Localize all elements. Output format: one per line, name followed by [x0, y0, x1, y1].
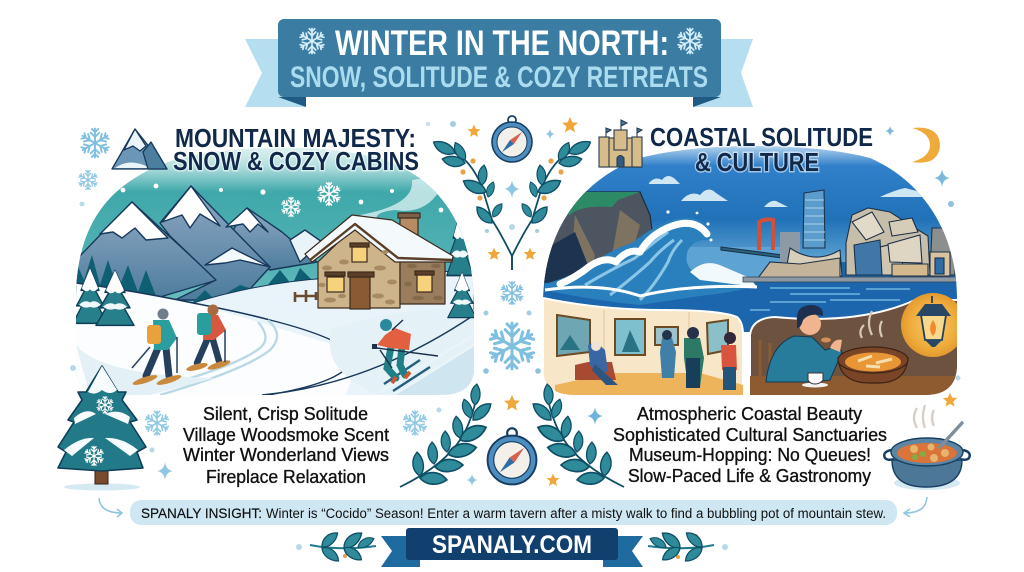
callout: insight bar	[130, 500, 897, 525]
panel: mountain scene	[70, 140, 480, 400]
callout: insight bar: SPANALY INSIGHT:	[141, 505, 262, 521]
tower	[721, 190, 955, 278]
branches: upper	[431, 138, 593, 270]
sea	[540, 262, 960, 332]
cliff	[543, 192, 652, 282]
cabin door and windows	[325, 243, 434, 309]
text block: mountain bullets: Winter Wonderland Views	[183, 445, 389, 465]
text block: mountain bullets: Village Woodsmoke Scent	[183, 425, 389, 445]
arrow: insight right	[904, 497, 927, 517]
banner body	[278, 19, 721, 97]
skier	[372, 319, 438, 391]
icon: castle	[599, 120, 642, 167]
wave	[545, 210, 757, 305]
footer banner	[381, 528, 643, 567]
footer banner: SPANALY.COM	[432, 531, 592, 559]
trees in scene	[76, 268, 102, 324]
title line 2: SNOW, SOLITUDE & COZY RETREATS	[290, 61, 708, 94]
icon: side snowflakes	[78, 129, 535, 435]
icon: title snowflake left	[299, 28, 325, 54]
callout: insight bar: Winter is “Cocido” Season! Enter a warm tavern after a misty walk to find a bubbling pot of mountain stew.	[266, 506, 886, 521]
banner folds	[278, 97, 721, 107]
mountains	[76, 186, 322, 300]
lantern glow	[901, 293, 957, 357]
panel: coastal scene	[540, 140, 965, 398]
text block: coastal bullets: Sophisticated Cultural Sanctuaries	[613, 425, 887, 445]
stew bowl	[838, 358, 908, 383]
title line 1: WINTER IN THE NORTH:	[335, 24, 669, 63]
banner ribbon ends	[245, 39, 753, 107]
icon: moon	[912, 128, 940, 163]
Guggenheim museum	[780, 232, 800, 262]
text block: coastal bullets: Atmospheric Coastal Beauty	[637, 404, 862, 424]
heading: mountain: SNOW & COZY CABINS	[173, 146, 419, 176]
arrow: insight left	[99, 498, 122, 517]
text block: coastal bullets: Slow-Paced Life & Gastronomy	[628, 466, 871, 486]
cabin	[305, 213, 453, 308]
snow ground	[193, 270, 474, 400]
title banner	[245, 19, 753, 107]
text block: mountain bullets: Silent, Crisp Solitude	[203, 404, 368, 424]
heading: coastal: COASTAL SOLITUDE	[650, 122, 873, 152]
heading: coastal: & CULTURE	[695, 147, 819, 177]
text block: coastal bullets: Museum-Hopping: No Queues!	[629, 445, 871, 465]
branches: lower	[400, 384, 624, 487]
gallery panel	[543, 298, 743, 396]
icon: upper compass	[492, 116, 532, 162]
text block: coastal bullets	[613, 404, 887, 486]
snowshoer 1	[132, 308, 182, 387]
icon: mountain	[112, 129, 167, 169]
icon: lower compass	[488, 428, 536, 484]
heading: mountain: MOUNTAIN MAJESTY:	[175, 123, 416, 153]
red bridge	[759, 219, 773, 250]
text block: mountain bullets: Fireplace Relaxation	[206, 467, 366, 487]
heading: mountain	[173, 123, 419, 176]
icon: stew pot	[884, 405, 970, 490]
decor: dots and stars	[70, 117, 960, 486]
dining panel	[750, 293, 965, 398]
clouds	[649, 176, 940, 207]
gallery visitors	[575, 362, 616, 380]
footer sprigs	[296, 529, 728, 564]
text block: mountain bullets	[183, 404, 389, 487]
snowshoer 2	[186, 304, 231, 373]
cabin stones	[318, 250, 443, 304]
icon: decorated tree	[58, 366, 146, 490]
forest	[76, 255, 318, 302]
icon: title snowflake right	[677, 28, 703, 54]
heading: coastal	[650, 122, 873, 177]
diner	[766, 336, 842, 382]
